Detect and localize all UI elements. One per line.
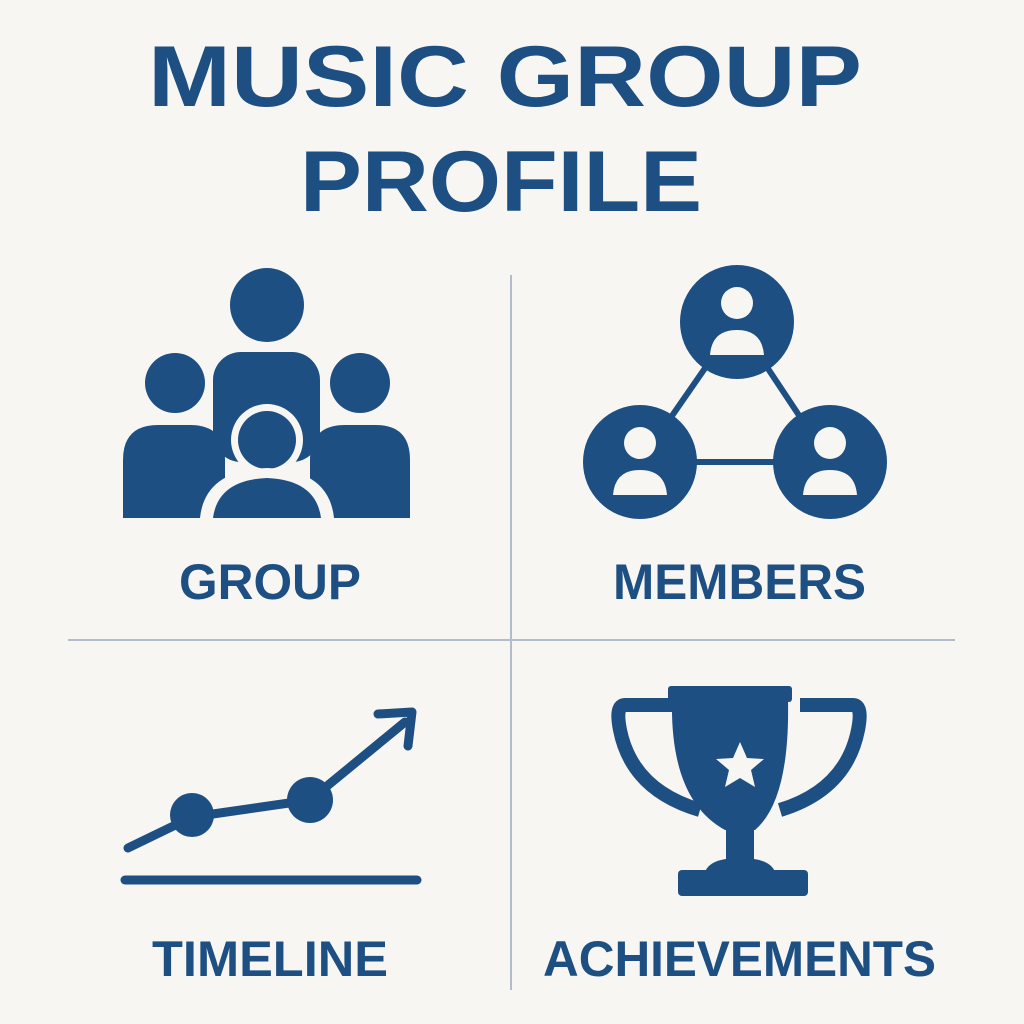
icon: trophy bbox=[618, 686, 860, 896]
title bbox=[148, 29, 862, 230]
label: group: GROUP bbox=[179, 554, 361, 610]
icon: members network bbox=[583, 265, 887, 519]
label: timeline: TIMELINE bbox=[152, 931, 388, 987]
label: members: MEMBERS bbox=[613, 554, 866, 610]
panel: achievements bbox=[543, 686, 936, 987]
title: PROFILE bbox=[300, 134, 702, 230]
panel: timeline bbox=[125, 712, 417, 987]
panel: group bbox=[123, 268, 410, 610]
icon: rising line chart bbox=[125, 712, 417, 880]
icon: group bbox=[123, 268, 410, 518]
label: achievements: ACHIEVEMENTS bbox=[543, 931, 936, 987]
title: MUSIC GROUP bbox=[148, 29, 862, 125]
panel: members bbox=[583, 265, 887, 610]
